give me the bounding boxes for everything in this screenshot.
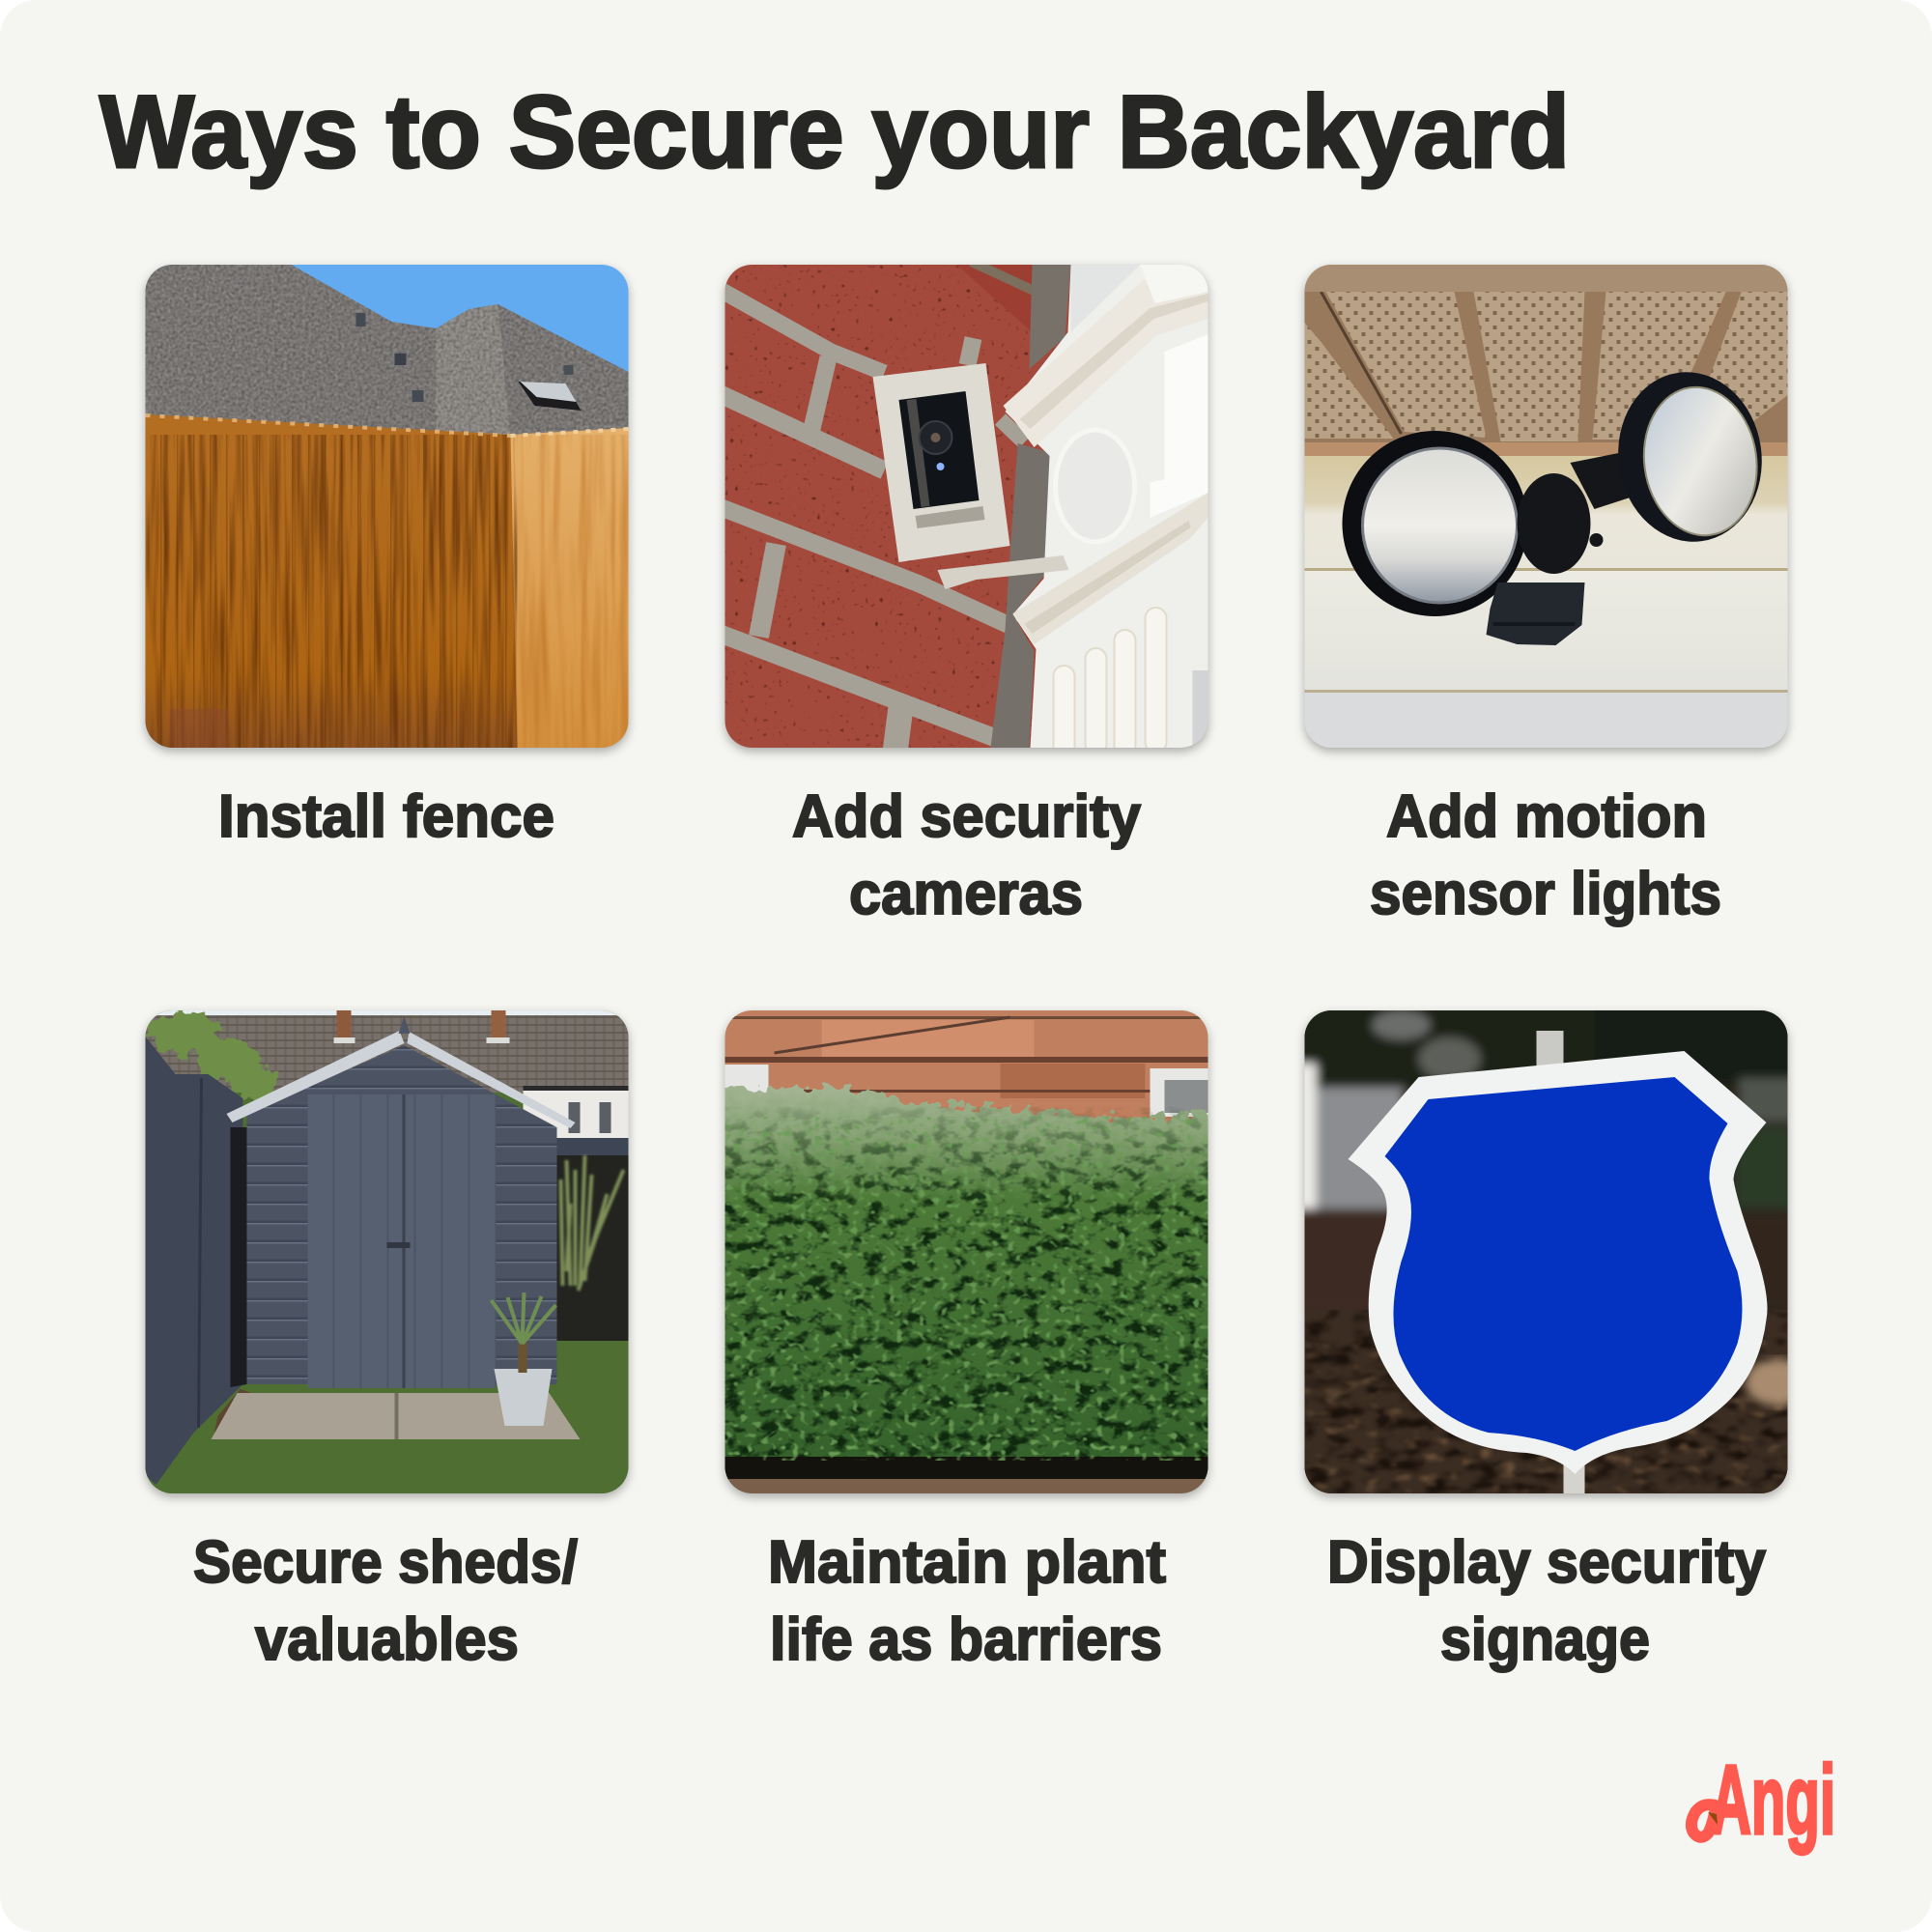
caption: add motion sensor lights: sensor lights bbox=[1370, 861, 1721, 927]
plant pot bbox=[495, 1369, 553, 1426]
caption: secure sheds and valuables bbox=[193, 1529, 578, 1673]
logo: Angi: Angi bbox=[1711, 1747, 1835, 1855]
shield white border bbox=[1349, 1051, 1768, 1474]
shield blue face bbox=[1385, 1077, 1743, 1451]
caption: add security cameras bbox=[792, 783, 1141, 927]
caption: maintain plant life as barriers bbox=[768, 1529, 1166, 1673]
panel: secure sheds bbox=[145, 1010, 628, 1673]
caption: display security signage: Display security bbox=[1327, 1529, 1766, 1596]
caption: maintain plant life as barriers: life as barriers bbox=[770, 1606, 1162, 1673]
photo: wooden fence bbox=[145, 265, 628, 748]
tree bbox=[149, 1010, 276, 1099]
caption: add motion sensor lights bbox=[1370, 783, 1721, 927]
left lamp bbox=[1343, 431, 1528, 616]
photo: security camera on brick wall bbox=[721, 262, 1208, 762]
caption: install fence: Install fence bbox=[218, 783, 554, 850]
caption: display security signage bbox=[1327, 1529, 1766, 1673]
photo: green hedge bbox=[705, 1010, 1227, 1493]
camera bbox=[937, 555, 1068, 589]
panel: motion sensor lights bbox=[1304, 265, 1787, 927]
photo: motion sensor flood lights bbox=[1304, 265, 1787, 748]
caption: display security signage: signage bbox=[1440, 1606, 1650, 1673]
shed bbox=[247, 1045, 556, 1384]
caption: add motion sensor lights: Add motion bbox=[1386, 783, 1707, 850]
panel: install fence bbox=[145, 265, 628, 850]
caption: secure sheds and valuables: Secure sheds/ bbox=[193, 1529, 578, 1596]
caption: add security cameras: Add security bbox=[792, 783, 1141, 850]
photo: grey garden shed bbox=[145, 1010, 628, 1493]
caption: secure sheds and valuables: valuables bbox=[255, 1606, 519, 1673]
white pillar bbox=[1005, 265, 1208, 748]
panel: security cameras bbox=[721, 262, 1208, 927]
caption: add security cameras: cameras bbox=[849, 861, 1083, 927]
photo: blue shield security sign bbox=[1285, 991, 1810, 1493]
sign post bbox=[1536, 1031, 1563, 1065]
title: Ways to Secure your Backyard bbox=[99, 73, 1570, 189]
panel: security signage bbox=[1285, 991, 1810, 1673]
caption: maintain plant life as barriers: Maintain plant bbox=[768, 1529, 1166, 1596]
motion sensor bbox=[1486, 582, 1584, 645]
paving slabs bbox=[211, 1393, 580, 1439]
right lamp arm and body bbox=[1571, 453, 1633, 509]
logo: Angi bbox=[1691, 1747, 1835, 1855]
hedge body bbox=[705, 1088, 1227, 1484]
side fence bbox=[145, 1037, 243, 1485]
panel: plant barriers bbox=[705, 1010, 1227, 1673]
